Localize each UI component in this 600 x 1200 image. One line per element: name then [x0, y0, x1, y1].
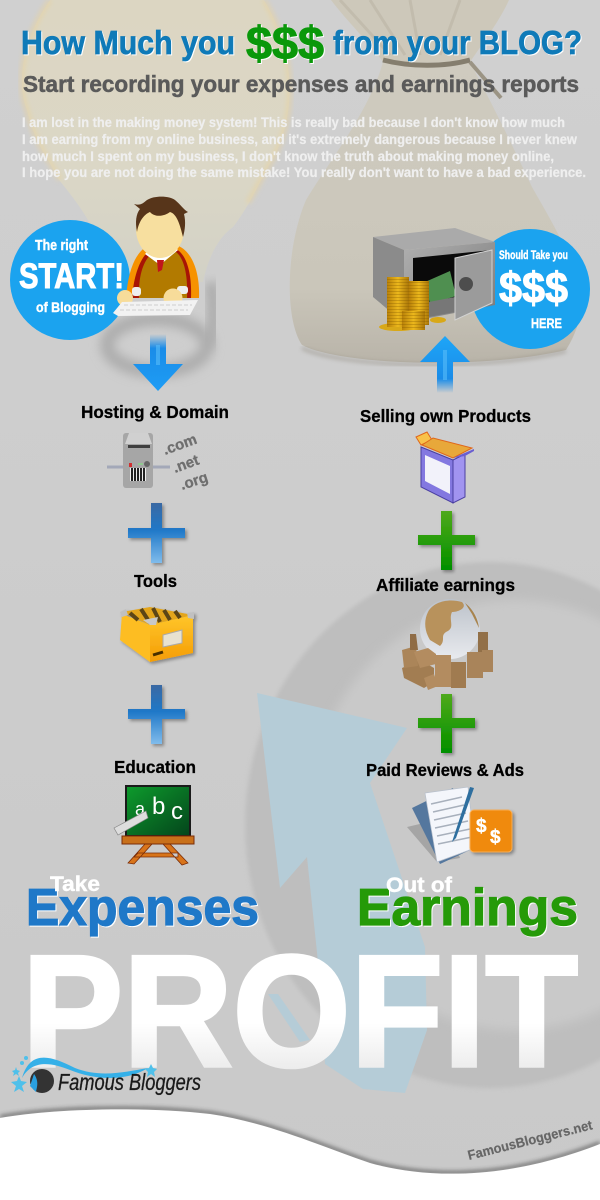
arrow: down	[133, 334, 183, 391]
background: pale blue arrow	[257, 693, 427, 1093]
plus: green 1	[418, 511, 475, 570]
label: tools: Tools	[134, 571, 177, 591]
icon: chalkboard: b	[152, 793, 165, 820]
callout: should take you: $$$	[499, 264, 568, 313]
icon: server with domains: .net	[171, 452, 201, 477]
label: hosting and domain: Hosting & Domain	[81, 402, 229, 422]
heading: take expenses: Expenses	[26, 879, 259, 937]
label: selling own products: Selling own Products	[360, 406, 531, 426]
title: How Much you	[21, 24, 235, 61]
label: paid reviews and ads: Paid Reviews & Ads	[366, 760, 524, 780]
logo: famous bloggers: Famous Bloggers	[58, 1069, 201, 1095]
icon: server with domains	[107, 431, 210, 494]
background: money bag	[290, 0, 581, 365]
icon: server with domains: .org	[178, 469, 210, 494]
icon: chalkboard: a	[135, 799, 146, 819]
icon: safe with coins	[373, 228, 495, 331]
plus: green 2	[418, 694, 475, 753]
footer url: FamousBloggers.net	[466, 1117, 594, 1163]
icon: globe with parcels	[402, 599, 493, 690]
icon: yellow tool box	[120, 607, 194, 662]
icon: server with domains: .com	[161, 431, 199, 459]
callout: the right start: The right	[35, 238, 88, 254]
icon: purple product box	[416, 432, 474, 503]
plus: blue 1	[128, 503, 185, 563]
title: $$$	[246, 17, 324, 69]
arrow: up	[420, 336, 470, 393]
intro paragraph: I am lost in the making money system! This is really bad because I don't know how much	[22, 115, 565, 130]
plus: blue 2	[128, 685, 185, 744]
intro paragraph	[22, 115, 586, 180]
heading: out of earnings: Out of	[386, 874, 453, 897]
background: circular arrow ring	[245, 562, 600, 1088]
icon: notes with dollars	[407, 787, 512, 864]
subtitle: Start recording your expenses and earnings reports	[23, 71, 579, 97]
intro paragraph: I hope you are not doing the same mistake! You really don't want to have a bad experience.	[22, 165, 586, 180]
label: affiliate earnings: Affiliate earnings	[376, 575, 515, 595]
background: light bulb	[22, 0, 290, 371]
label: education: Education	[114, 757, 196, 777]
heading: out of earnings: Earnings	[357, 879, 578, 937]
icon: blogger at keyboard	[113, 197, 199, 316]
heading: take expenses: Take	[50, 873, 100, 896]
callout: the right start	[10, 220, 130, 340]
intro paragraph: how much I spent on my business, I don't know the truth about making money online,	[22, 149, 554, 164]
callout: the right start: of Blogging	[36, 299, 105, 315]
logo: famous bloggers	[11, 1056, 201, 1095]
icon: chalkboard	[114, 785, 194, 865]
callout: should take you	[470, 229, 590, 349]
title	[21, 17, 582, 69]
footer white wave	[0, 1108, 600, 1200]
icon: notes with dollars: $	[476, 816, 487, 837]
icon: chalkboard: c	[171, 798, 183, 825]
callout: should take you: HERE	[531, 315, 562, 331]
icon: notes with dollars: $	[490, 827, 501, 848]
callout: the right start: START!	[19, 257, 124, 296]
intro paragraph: I am earning from my online business, and it's extremely dangerous because I never knew	[22, 132, 577, 147]
callout: should take you: Should Take you	[499, 248, 568, 262]
heading: profit: PROFIT	[22, 922, 578, 1100]
